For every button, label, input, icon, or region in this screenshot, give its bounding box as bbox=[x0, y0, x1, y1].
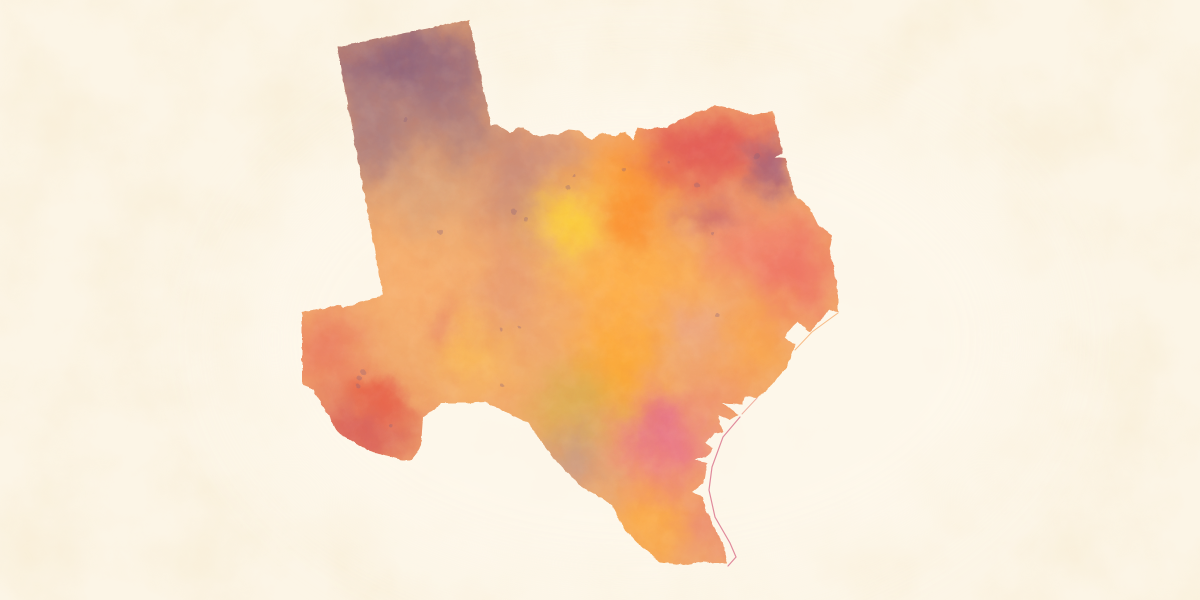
pigment speckles bbox=[356, 118, 760, 427]
center oranges bbox=[577, 140, 673, 250]
south-center bbox=[584, 323, 656, 407]
NE red bbox=[645, 112, 785, 188]
base wash bbox=[290, 10, 850, 580]
west bbox=[362, 258, 383, 302]
pigment mottling bbox=[360, 35, 786, 534]
color washes bbox=[287, 20, 837, 558]
barrier islands along the Gulf coast bbox=[709, 313, 838, 566]
map: Texas watercolor silhouette bbox=[287, 10, 850, 580]
panhandle mauve bbox=[310, 20, 500, 104]
